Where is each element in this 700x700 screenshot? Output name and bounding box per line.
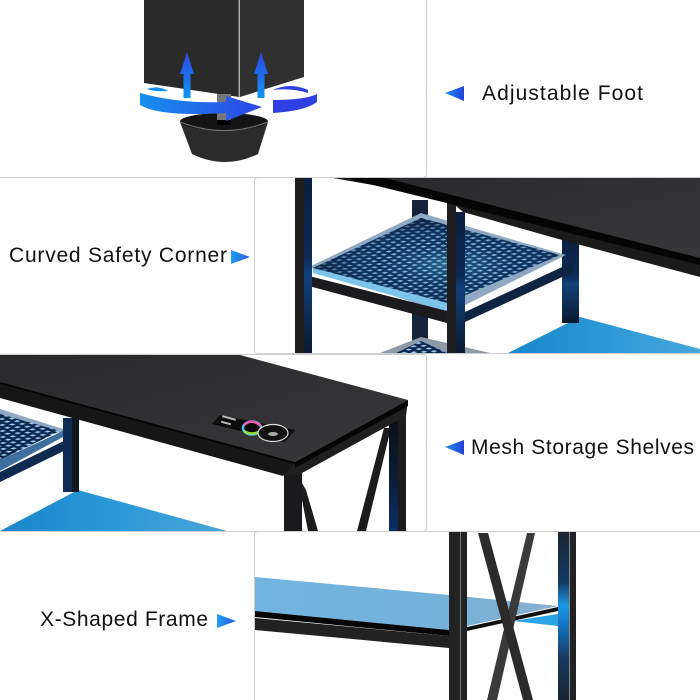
label: x-shaped frame bbox=[40, 608, 236, 631]
panel: curved safety corner bbox=[254, 178, 700, 354]
icon: pointer right bbox=[231, 250, 250, 264]
lower mesh shelf bbox=[380, 337, 490, 353]
rubber foot bbox=[180, 113, 268, 162]
label: adjustable foot bbox=[445, 82, 643, 105]
back leg bbox=[63, 418, 79, 492]
text: x-shaped frame: X-Shaped Frame bbox=[40, 608, 208, 631]
back legs bbox=[412, 200, 579, 353]
front legs bbox=[295, 178, 465, 353]
blue shelf surface bbox=[255, 577, 558, 630]
label: mesh storage shelves bbox=[445, 436, 694, 459]
panel: mesh storage shelves bbox=[0, 354, 426, 532]
threaded bolt bbox=[217, 94, 231, 125]
x braces bbox=[478, 533, 535, 700]
label: curved safety corner bbox=[9, 244, 250, 267]
icon: pointer right bbox=[217, 614, 236, 628]
left upright bbox=[449, 532, 467, 700]
icon: up arrow left bbox=[180, 52, 194, 98]
desktop and apron bbox=[333, 178, 700, 277]
desktop bbox=[0, 355, 408, 468]
right upright bbox=[558, 532, 576, 700]
icon: up arrow right bbox=[254, 52, 268, 98]
blue shelf bbox=[0, 490, 227, 531]
side cross brace bbox=[302, 428, 391, 531]
shelf front edge bbox=[255, 607, 558, 648]
control panel on desk bbox=[212, 415, 295, 442]
icon: rotation arrow bbox=[140, 86, 317, 121]
table leg post bbox=[144, 0, 304, 97]
icon: pointer left bbox=[445, 86, 464, 101]
text: adjustable foot: Adjustable Foot bbox=[482, 82, 643, 105]
text: mesh storage shelves: Mesh Storage Shelves bbox=[471, 436, 694, 459]
icon: pointer left bbox=[445, 440, 464, 455]
lower shelf blue bbox=[508, 317, 700, 353]
mesh shelf fragment bbox=[0, 409, 72, 482]
panel: x-shaped frame bbox=[254, 532, 700, 700]
text: curved safety corner: Curved Safety Corner bbox=[9, 244, 227, 267]
panel: adjustable foot bbox=[0, 0, 426, 178]
mesh shelf bbox=[305, 213, 573, 323]
legs bbox=[284, 405, 406, 531]
apron bbox=[0, 382, 408, 476]
